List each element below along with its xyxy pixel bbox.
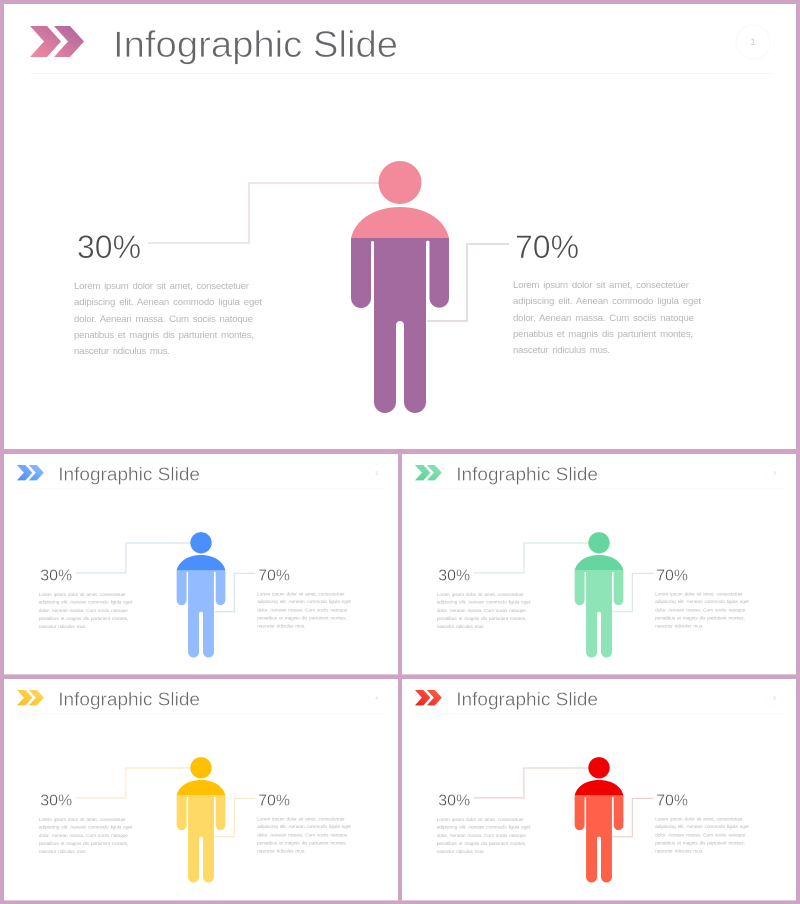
left percentage: 30% xyxy=(77,229,141,265)
page number badge xyxy=(30,25,772,74)
right text block xyxy=(655,816,749,855)
page number badge xyxy=(17,689,386,714)
right text block: adipiscing elit. Aenean commodo ligula eget xyxy=(655,599,749,605)
right text block: adipiscing elit. Aenean commodo ligula eget xyxy=(257,599,351,605)
right text block: Lorem ipsum dolor sit amet, consectetuer xyxy=(655,591,743,597)
right text block: penatibus et magnis dis parturient montes, xyxy=(257,841,347,847)
panel: main slide pink xyxy=(4,4,796,449)
left text block: penatibus et magnis dis parturient montes, xyxy=(74,330,254,341)
left text block: nascetur ridiculus mus. xyxy=(74,346,170,357)
right text block: penatibus et magnis dis parturient montes, xyxy=(655,616,745,622)
person figure xyxy=(575,532,623,657)
right percentage: 70% xyxy=(656,567,688,584)
heading: Infographic Slide xyxy=(113,24,398,65)
icon: chevrons blue xyxy=(17,465,44,480)
right text block: Lorem ipsum dolor sit amet, consectetuer xyxy=(257,816,345,822)
page number badge xyxy=(415,464,784,489)
right text block: penatibus et magnis dis parturient montes, xyxy=(513,329,693,340)
panel: small slide red xyxy=(402,679,796,900)
page number badge xyxy=(415,689,784,714)
left text block: adipiscing elit. Aenean commodo ligula eget xyxy=(39,600,133,606)
right text block: dolor. Aenean massa. Cum sociis natoque xyxy=(655,833,746,839)
right percentage: 70% xyxy=(258,792,290,809)
right text block: penatibus et magnis dis parturient montes, xyxy=(257,616,347,622)
right text block: adipiscing elit. Aenean commodo ligula eget xyxy=(257,824,351,830)
page number badge: 1 xyxy=(750,37,756,47)
left connector line xyxy=(76,768,191,798)
left connector line xyxy=(474,768,589,798)
icon: chevrons red xyxy=(415,690,442,705)
right percentage: 70% xyxy=(258,567,290,584)
left text block: adipiscing elit. Aenean commodo ligula eget xyxy=(39,825,133,831)
left text block xyxy=(437,592,531,630)
panel: small slide blue xyxy=(4,454,398,674)
right text block xyxy=(655,591,749,630)
left text block: adipiscing elit. Aenean commodo ligula eget xyxy=(74,297,262,308)
left text block: dolor. Aenean massa. Cum sociis natoque xyxy=(39,608,128,614)
right text block: nascetur ridiculus mus. xyxy=(655,849,703,855)
person figure xyxy=(177,757,225,882)
right text block: Lorem ipsum dolor sit amet, consectetuer xyxy=(513,280,690,291)
icon: chevrons yellow xyxy=(17,690,44,705)
left text block xyxy=(39,592,133,630)
icon: chevrons pink xyxy=(30,26,84,57)
page number badge xyxy=(17,464,386,489)
right percentage: 70% xyxy=(656,792,688,809)
right text block xyxy=(257,591,351,630)
left connector line xyxy=(148,183,380,243)
right text block: penatibus et magnis dis parturient montes, xyxy=(655,841,745,847)
heading: Infographic Slide xyxy=(456,688,598,709)
left percentage: 30% xyxy=(438,792,470,809)
right text block: dolor. Aenean massa. Cum sociis natoque xyxy=(655,608,746,614)
heading: Infographic Slide xyxy=(58,688,200,709)
right text block: nascetur ridiculus mus. xyxy=(257,849,305,855)
left text block: nascetur ridiculus mus. xyxy=(437,849,485,855)
left text block: penatibus et magnis dis parturient montes, xyxy=(437,616,526,622)
right percentage: 70% xyxy=(515,229,579,265)
left text block: penatibus et magnis dis parturient montes, xyxy=(39,841,128,847)
right text block: nascetur ridiculus mus. xyxy=(513,345,610,356)
right connector line xyxy=(427,244,509,321)
left text block: adipiscing elit. Aenean commodo ligula eget xyxy=(437,600,531,606)
left text block: Lorem ipsum dolor sit amet, consectetuer xyxy=(39,592,126,598)
right text block: adipiscing elit. Aenean commodo ligula eget xyxy=(655,824,749,830)
page number badge: 3 xyxy=(773,470,776,475)
left text block: adipiscing elit. Aenean commodo ligula eget xyxy=(437,825,531,831)
panel: small slide green xyxy=(402,454,796,674)
heading: Infographic Slide xyxy=(58,463,200,484)
left text block: dolor. Aenean massa. Cum sociis natoque xyxy=(437,608,526,614)
panel: small slide yellow xyxy=(4,679,398,900)
right text block: dolor. Aenean massa. Cum sociis natoque xyxy=(257,833,348,839)
right connector line xyxy=(612,798,653,837)
left connector line xyxy=(76,543,191,573)
left text block: Lorem ipsum dolor sit amet, consectetuer xyxy=(437,817,524,823)
right text block: nascetur ridiculus mus. xyxy=(257,624,305,630)
right text block: Lorem ipsum dolor sit amet, consectetuer xyxy=(655,816,743,822)
left text block: penatibus et magnis dis parturient montes, xyxy=(39,616,128,622)
left text block: nascetur ridiculus mus. xyxy=(39,849,87,855)
left text block: Lorem ipsum dolor sit amet, consectetuer xyxy=(39,817,126,823)
right text block: adipiscing elit. Aenean commodo ligula eget xyxy=(513,296,701,307)
left text block: dolor. Aenean massa. Cum sociis natoque xyxy=(39,833,128,839)
right text block: dolor. Aenean massa. Cum sociis natoque xyxy=(257,608,348,614)
right text block xyxy=(513,280,701,356)
right connector line xyxy=(612,573,653,612)
right connector line xyxy=(214,798,255,837)
right connector line xyxy=(214,573,255,612)
left text block: Lorem ipsum dolor sit amet, consectetuer xyxy=(74,281,250,292)
person figure xyxy=(575,757,623,882)
left text block: penatibus et magnis dis parturient montes, xyxy=(437,841,526,847)
page number badge: 4 xyxy=(375,695,378,700)
left percentage: 30% xyxy=(438,567,470,584)
left text block: Lorem ipsum dolor sit amet, consectetuer xyxy=(437,592,524,598)
right text block: nascetur ridiculus mus. xyxy=(655,624,703,630)
left percentage: 30% xyxy=(40,792,72,809)
right text block xyxy=(257,816,351,855)
left text block xyxy=(74,281,262,357)
left percentage: 30% xyxy=(40,567,72,584)
right text block: Lorem ipsum dolor sit amet, consectetuer xyxy=(257,591,345,597)
left text block xyxy=(39,817,133,855)
icon: chevrons green xyxy=(415,465,442,480)
left text block: nascetur ridiculus mus. xyxy=(39,624,87,630)
person figure xyxy=(177,532,225,657)
left text block: dolor. Aenean massa. Cum sociis natoque xyxy=(437,833,526,839)
left text block: dolor. Aenean massa. Cum sociis natoque xyxy=(74,314,253,325)
heading: Infographic Slide xyxy=(456,463,598,484)
page number badge: 5 xyxy=(773,695,776,700)
page number badge: 2 xyxy=(375,470,378,475)
right text block: dolor. Aenean massa. Cum sociis natoque xyxy=(513,313,694,324)
left text block xyxy=(437,817,531,855)
left text block: nascetur ridiculus mus. xyxy=(437,624,485,630)
person figure xyxy=(351,161,449,413)
left connector line xyxy=(474,543,589,573)
